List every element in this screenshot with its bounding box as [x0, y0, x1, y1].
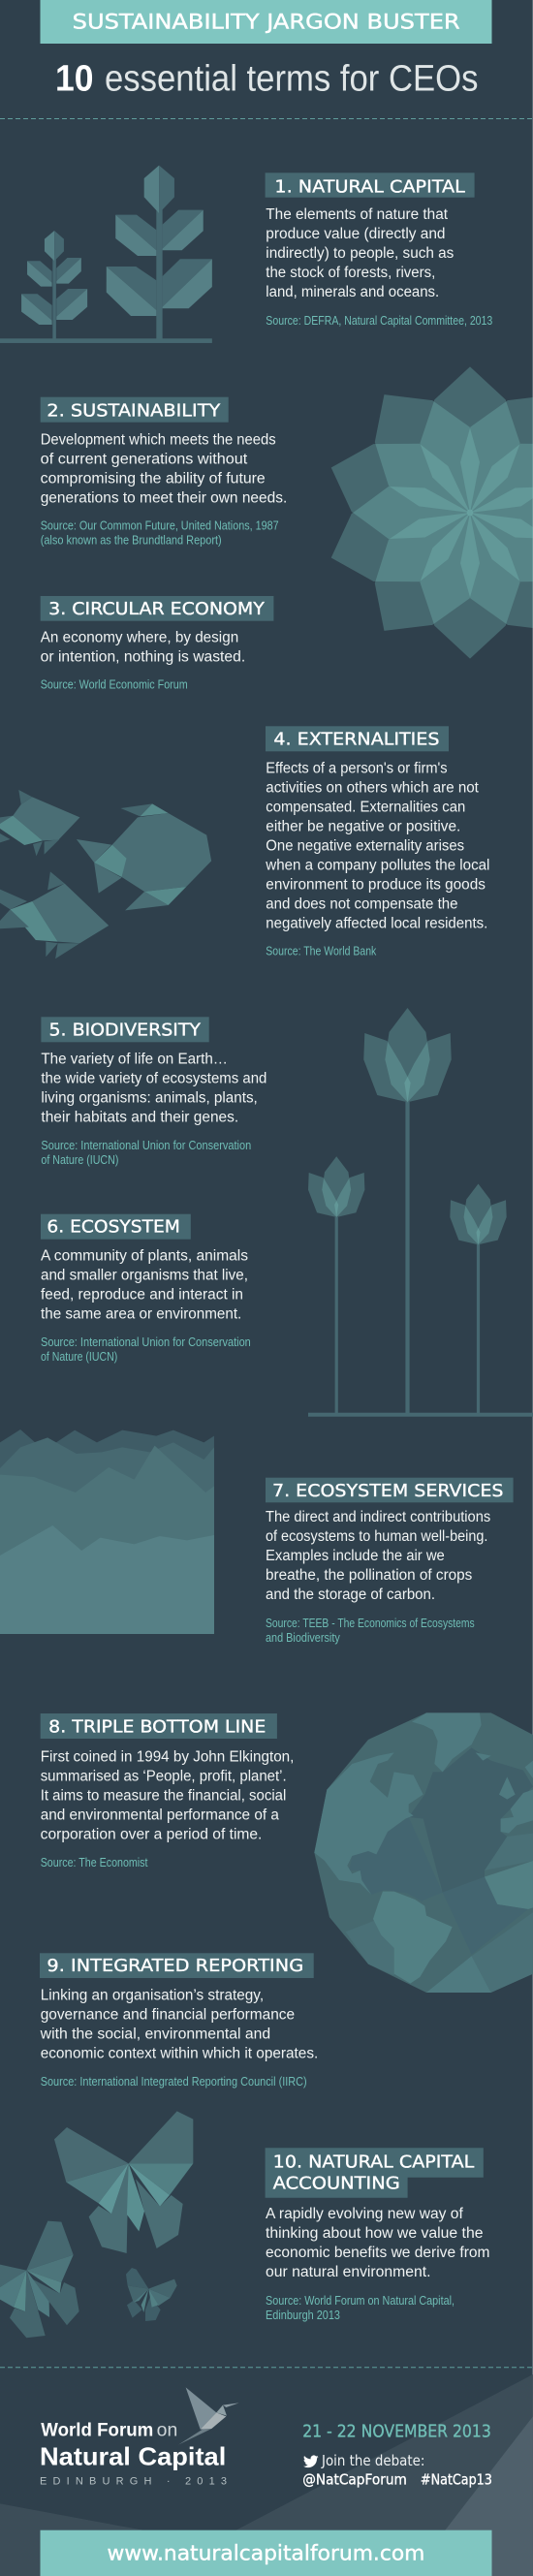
- label: [266, 726, 449, 751]
- definition: Development which meets the needs: [41, 431, 276, 448]
- label: 7. ECOSYSTEM SERVICES: [272, 1481, 504, 1501]
- definition: environment to produce its goods: [266, 876, 486, 893]
- footer logo: [40, 2387, 239, 2487]
- illustration: globe: [314, 1712, 533, 1993]
- source: Source: International Union for Conservation: [41, 1139, 251, 1152]
- header banner: [41, 0, 492, 44]
- label: 6. ECOSYSTEM: [47, 1217, 180, 1238]
- source: [41, 519, 279, 548]
- source: Source: International Union for Conservation: [41, 1335, 251, 1349]
- label: 8. TRIPLE BOTTOM LINE: [48, 1716, 266, 1737]
- definition: Linking an organisation’s strategy,: [41, 1987, 264, 2003]
- term 7: ecosystem services: [266, 1478, 514, 1645]
- definition: indirectly) to people, such as: [266, 245, 455, 262]
- label: [41, 1017, 209, 1042]
- definition: produce value (directly and: [266, 226, 446, 242]
- illustration: plants: [0, 166, 212, 343]
- footer logo: EDINBURGH · 2013: [40, 2475, 227, 2487]
- definition: [266, 1509, 490, 1603]
- source: Source: International Integrated Reporting Council (IIRC): [41, 2075, 307, 2089]
- definition: breathe, the pollination of crops: [266, 1567, 473, 1584]
- definition: [40, 1987, 318, 2061]
- event details: [302, 2422, 492, 2488]
- definition: living organisms: animals, plants,: [41, 1089, 258, 1106]
- source: [266, 1617, 475, 1645]
- definition: corporation over a period of time.: [41, 1826, 262, 1842]
- label: [41, 397, 229, 423]
- label: 5. BIODIVERSITY: [48, 1021, 202, 1041]
- definition: summarised as ‘People, profit, planet’.: [41, 1768, 287, 1784]
- twitter handles: #NatCap13: [421, 2470, 492, 2488]
- illustration: tulips: [308, 1008, 533, 1417]
- definition: [266, 206, 455, 300]
- icon: origami bird: [178, 2387, 239, 2445]
- definition: A community of plants, animals: [41, 1248, 248, 1265]
- definition: or intention, nothing is wasted.: [41, 649, 245, 666]
- definition: feed, reproduce and interact in: [41, 1287, 243, 1304]
- definition: of ecosystems to human well-being.: [266, 1528, 487, 1545]
- label: 1. NATURAL CAPITAL: [274, 176, 465, 197]
- source: of Nature (IUCN): [41, 1153, 118, 1167]
- label: 4. EXTERNALITIES: [273, 729, 440, 749]
- footer logo: on: [157, 2420, 177, 2440]
- term 6: ecosystem: [41, 1214, 251, 1364]
- definition: [265, 760, 489, 931]
- definition: generations to meet their own needs.: [41, 489, 287, 506]
- definition: [41, 630, 245, 666]
- definition: The direct and indirect contributions: [266, 1509, 490, 1525]
- source: of Nature (IUCN): [41, 1350, 117, 1364]
- definition: The elements of nature that: [266, 206, 449, 223]
- definition: [41, 1748, 294, 1842]
- definition: when a company pollutes the local: [265, 857, 489, 873]
- definition: their habitats and their genes.: [41, 1109, 238, 1125]
- definition: either be negative or positive.: [266, 818, 460, 834]
- twitter call to action: Join the debate:: [321, 2452, 424, 2469]
- definition: Examples include the air we: [266, 1548, 445, 1564]
- term 8: triple bottom line: [41, 1713, 294, 1869]
- definition: [266, 2206, 490, 2280]
- label: [266, 2148, 484, 2198]
- definition: negatively affected local residents.: [266, 915, 487, 931]
- definition: It aims to measure the financial, social: [41, 1787, 286, 1804]
- term 1: natural capital: [266, 173, 492, 328]
- label: 10. NATURAL CAPITAL: [273, 2152, 474, 2173]
- definition: A rapidly evolving new way of: [266, 2206, 463, 2222]
- definition: economic benefits we derive from: [266, 2245, 490, 2261]
- term 9: integrated reporting: [40, 1953, 318, 2089]
- definition: and the storage of carbon.: [266, 1586, 435, 1603]
- definition: [41, 1248, 248, 1323]
- definition: of current generations without: [41, 451, 248, 467]
- website banner: www.naturalcapitalforum.com: [107, 2542, 424, 2565]
- illustration: flower: [316, 365, 533, 660]
- label: ACCOUNTING: [273, 2173, 400, 2193]
- illustration: mountains: [0, 1429, 214, 1634]
- definition: The variety of life on Earth…: [41, 1051, 228, 1067]
- term 5: biodiversity: [41, 1017, 266, 1167]
- definition: governance and financial performance: [41, 2006, 295, 2023]
- illustration: fish: [0, 790, 211, 958]
- source: Source: The World Bank: [266, 945, 377, 958]
- definition: with the social, environmental and: [40, 2026, 270, 2042]
- term 10: natural capital accounting: [266, 2148, 490, 2322]
- definition: activities on others which are not: [266, 779, 480, 796]
- definition: the same area or environment.: [41, 1306, 241, 1323]
- definition: An economy where, by design: [41, 630, 238, 646]
- definition: and environmental performance of a: [41, 1806, 279, 1823]
- icon: twitter bird: [303, 2455, 319, 2467]
- definition: land, minerals and oceans.: [266, 284, 439, 300]
- definition: and does not compensate the: [266, 895, 457, 912]
- definition: our natural environment.: [266, 2264, 430, 2280]
- definition: [41, 1051, 266, 1125]
- twitter handles: [302, 2470, 492, 2488]
- source: (also known as the Brundtland Report): [41, 534, 222, 548]
- source: [41, 1139, 251, 1167]
- term 4: externalities: [265, 726, 489, 958]
- definition: the stock of forests, rivers,: [266, 265, 435, 281]
- illustration: butterflies: [0, 2111, 193, 2338]
- definition: the wide variety of ecosystems and: [41, 1070, 266, 1086]
- website banner: [41, 2530, 492, 2576]
- source: Source: TEEB - The Economics of Ecosystems: [266, 1617, 475, 1630]
- definition: compromising the ability of future: [41, 470, 266, 487]
- source: Source: The Economist: [41, 1856, 148, 1869]
- source: Source: World Forum on Natural Capital,: [266, 2294, 455, 2308]
- footer logo: Natural Capital: [40, 2441, 226, 2470]
- definition: Effects of a person's or firm's: [266, 760, 448, 776]
- definition: [41, 431, 287, 506]
- source: [266, 2294, 455, 2322]
- source: Source: DEFRA, Natural Capital Committee, 2013: [266, 314, 492, 328]
- definition: thinking about how we value the: [266, 2225, 483, 2242]
- title: essential terms for CEOs: [105, 58, 479, 99]
- dates: 21 - 22 NOVEMBER 2013: [302, 2422, 491, 2441]
- source: [41, 1335, 251, 1364]
- term 3: circular economy: [41, 596, 273, 692]
- definition: First coined in 1994 by John Elkington,: [41, 1748, 294, 1765]
- term 2: sustainability: [41, 397, 287, 548]
- definition: economic context within which it operates.: [41, 2045, 318, 2061]
- source: Source: World Economic Forum: [41, 678, 188, 692]
- twitter handles: @NatCapForum: [302, 2470, 407, 2488]
- definition: and smaller organisms that live,: [41, 1268, 248, 1284]
- label: 9. INTEGRATED REPORTING: [47, 1956, 303, 1976]
- source: Source: Our Common Future, United Nations, 1987: [41, 519, 279, 533]
- title: 10: [55, 58, 93, 99]
- label: [41, 1214, 191, 1240]
- source: Edinburgh 2013: [266, 2309, 340, 2322]
- definition: One negative externality arises: [266, 837, 464, 854]
- label: 2. SUSTAINABILITY: [47, 400, 221, 421]
- header banner: SUSTAINABILITY JARGON BUSTER: [73, 10, 460, 34]
- footer logo: World Forum: [41, 2420, 153, 2440]
- source: and Biodiversity: [266, 1631, 340, 1645]
- label: 3. CIRCULAR ECONOMY: [48, 599, 266, 619]
- definition: compensated. Externalities can: [266, 799, 465, 815]
